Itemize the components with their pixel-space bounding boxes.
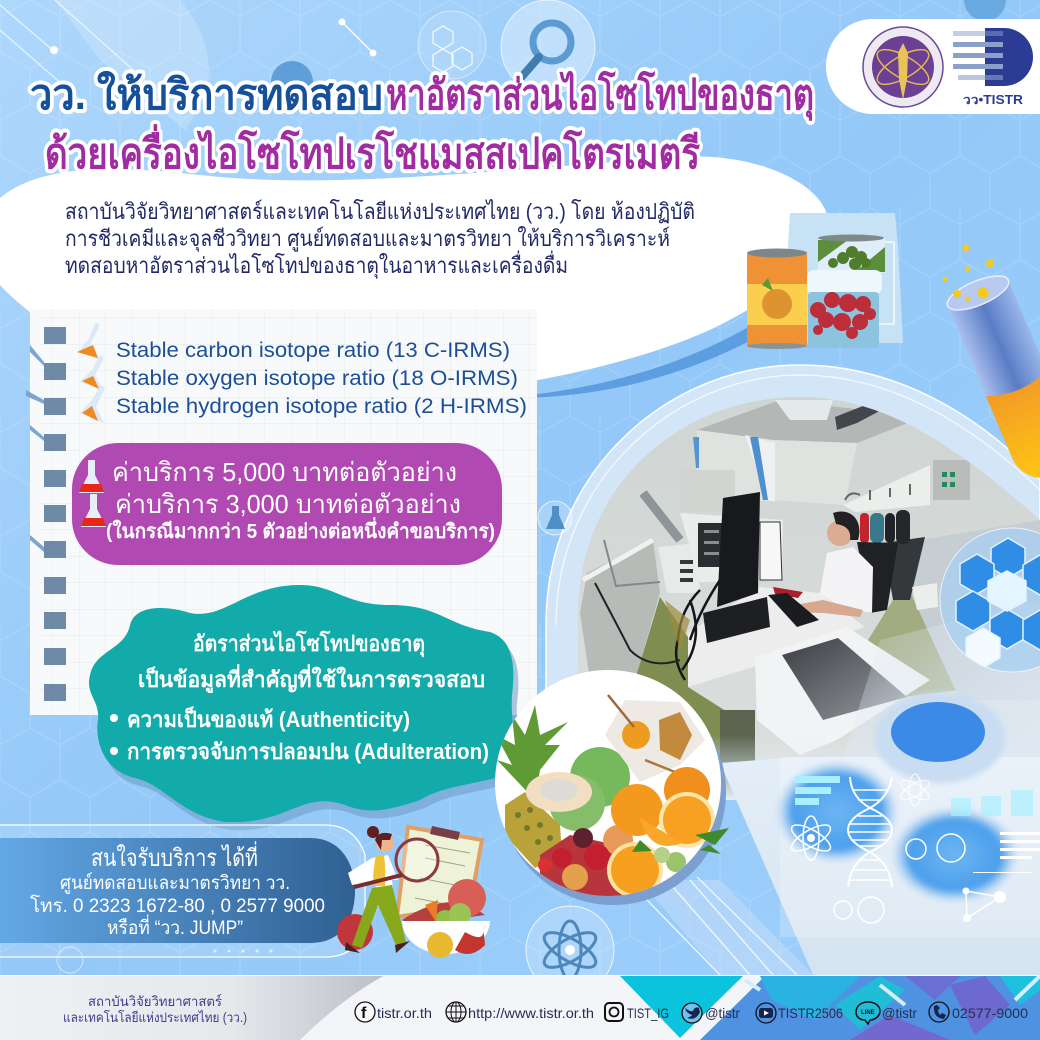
panel: service fees: ค่าบริการ 3,000 บาทต่อตัวอย่าง	[115, 489, 461, 519]
illustration: scientist with clipboard and food bowl	[337, 826, 490, 958]
footer: tistr.or.th	[377, 1005, 432, 1021]
title: ด้วยเครื่องไอโซโทปเรโชแมสสเปคโตรเมตรี	[45, 124, 700, 177]
hexagon sphere	[940, 528, 1040, 672]
footer	[0, 975, 1040, 1040]
logos panel	[826, 19, 1040, 114]
contact banner: โทร. 0 2323 1672-80 , 0 2577 9000	[30, 894, 325, 917]
footer: f	[361, 1005, 367, 1022]
panel: teal callout: ความเป็นของแท้ (Authenticity)	[127, 705, 410, 732]
isotope list: Stable hydrogen isotope ratio (2 H-IRMS)	[116, 395, 527, 418]
panel: teal callout	[89, 585, 518, 830]
ring around lab photo	[546, 365, 1040, 790]
intro paragraph: สถาบันวิจัยวิทยาศาสตร์และเทคโนโลยีแห่งประเทศไทย (วว.) โดย ห้องปฏิบัติ	[65, 199, 695, 224]
blue swoosh under cloud	[500, 314, 770, 398]
panel: teal callout: เป็นข้อมูลที่สำคัญที่ใช้ในการตรวจสอบ	[138, 663, 485, 694]
footer: LINE	[861, 1010, 875, 1016]
icon: hexagon molecule circle	[418, 11, 486, 79]
icon: flask circle	[538, 501, 572, 535]
contact banner	[0, 825, 365, 973]
title: หาอัตราส่วนไอโซโทปของธาตุ	[386, 70, 814, 121]
fruit circle	[495, 670, 729, 905]
intro paragraph	[65, 199, 695, 279]
isotope list	[77, 322, 527, 423]
icon: test tube with bubbles	[942, 244, 1040, 488]
intro paragraph: ทดสอบหาอัตราส่วนไอโซโทปของธาตุในอาหารและเครื่องดื่ม	[65, 250, 568, 279]
notebook paper	[26, 309, 537, 715]
footer: @tistr	[705, 1005, 740, 1021]
isotope list: Stable carbon isotope ratio (13 C-IRMS)	[116, 339, 510, 362]
panel: teal callout: อัตราส่วนไอโซโทปของธาตุ	[193, 630, 425, 658]
contact banner: หรือที่ “วว. JUMP”	[107, 914, 243, 939]
footer: @tistr	[882, 1005, 917, 1021]
lab photo	[570, 390, 1040, 810]
intro paragraph: การชีวเคมีและจุลชีววิทยา ศูนย์ทดสอบและมาตรวิทยา ให้บริการวิเคราะห์	[65, 226, 670, 252]
footer: และเทคโนโลยีแห่งประเทศไทย (วว.)	[63, 1009, 247, 1025]
white cloud panel	[0, 156, 827, 398]
icon: atom circle	[526, 906, 614, 994]
footer: http://www.tistr.or.th	[468, 1005, 594, 1021]
isotope list: Stable oxygen isotope ratio (18 O-IRMS)	[116, 367, 518, 390]
logos panel: วว•TISTR	[963, 93, 1023, 107]
contact banner: สนใจรับบริการ ได้ที่	[91, 841, 258, 872]
panel: service fees: ค่าบริการ 5,000 บาทต่อตัวอย่าง	[112, 457, 457, 487]
footer: 02577-9000	[952, 1005, 1028, 1021]
icon: magnifier circle	[501, 0, 595, 94]
panel: service fees: (ในกรณีมากกว่า 5 ตัวอย่างต่อหนึ่งคำขอบริการ)	[106, 516, 495, 543]
lower-right science panel	[640, 693, 1040, 975]
title	[30, 70, 814, 177]
illustration: food cans and jar	[747, 213, 903, 349]
footer: TIST_IG	[627, 1005, 669, 1021]
panel: service fees	[72, 443, 502, 565]
footer: สถาบันวิจัยวิทยาศาสตร์	[88, 993, 222, 1009]
contact banner: ศูนย์ทดสอบและมาตรวิทยา วว.	[60, 872, 290, 894]
title: วว. ให้บริการทดสอบ	[30, 70, 383, 118]
footer: TISTR2506	[778, 1005, 843, 1021]
panel: teal callout: การตรวจจับการปลอมปน (Adulteration)	[127, 739, 489, 764]
